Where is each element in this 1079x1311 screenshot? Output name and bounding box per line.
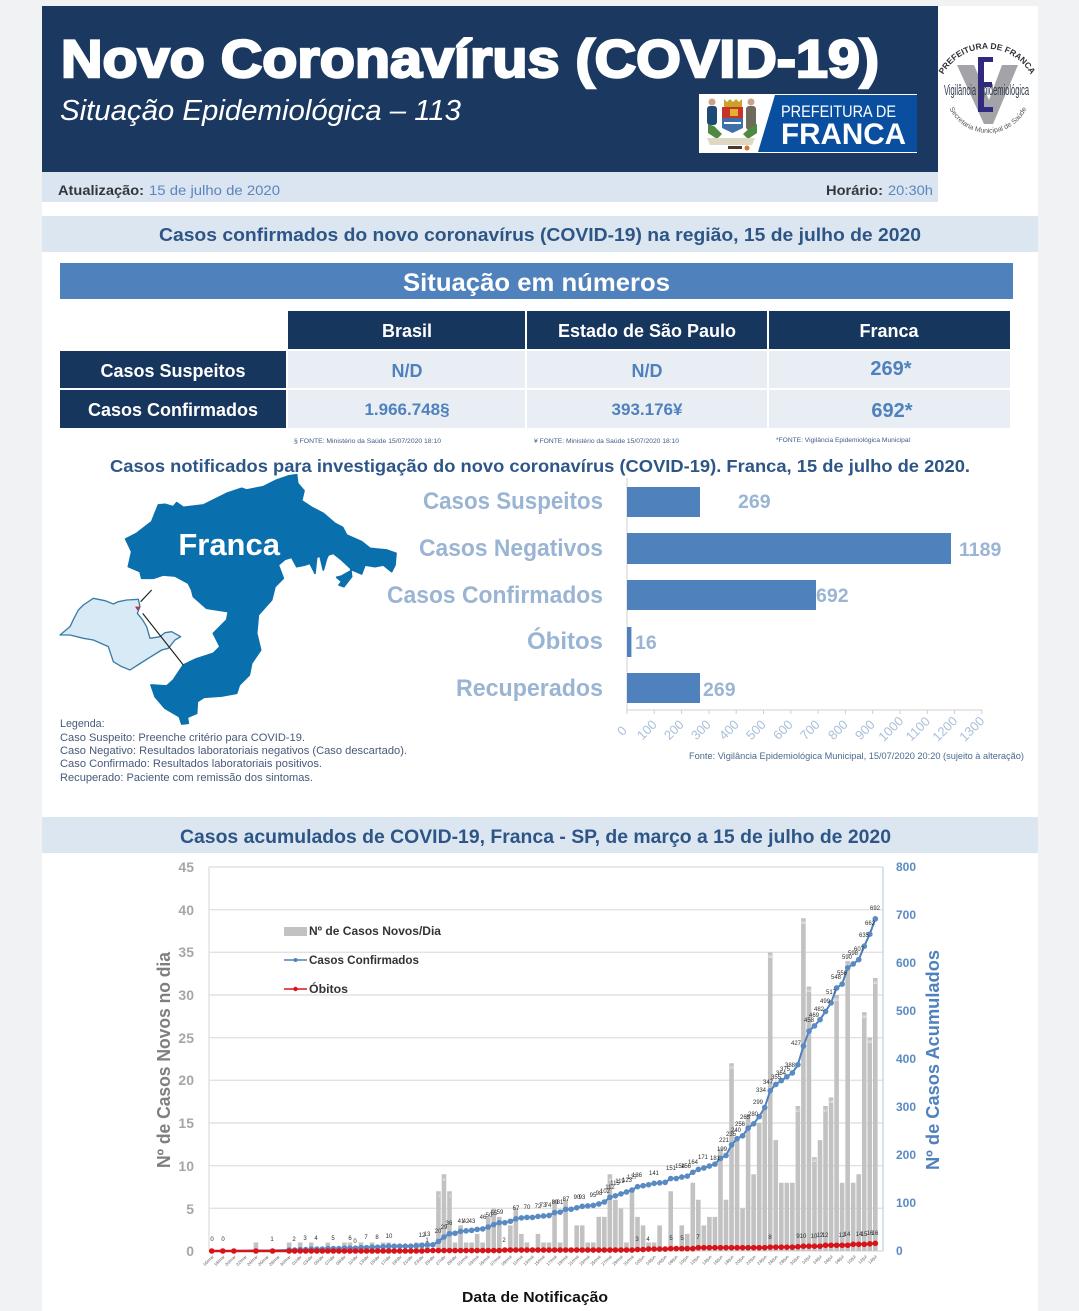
data labels: 590	[842, 955, 853, 961]
x axis date labels: 04/jun	[645, 1254, 657, 1266]
x axis date labels: 29/mai	[611, 1254, 624, 1267]
logo: Vigilância Epidemiológica	[938, 42, 1034, 134]
data labels: 2	[292, 1237, 296, 1243]
x axis date labels: 20/mar	[224, 1254, 237, 1267]
data labels: 3	[635, 1237, 639, 1243]
bar chart: case status: 269	[738, 491, 771, 513]
data labels: 635	[859, 933, 870, 939]
bar chart: case status: Recuperados	[456, 675, 603, 702]
data labels: 7	[364, 1235, 368, 1241]
x axis date labels: 05/abr	[313, 1254, 325, 1266]
x axis date labels: 06/jun	[656, 1254, 668, 1266]
x axis date labels: 10/jul	[846, 1254, 857, 1265]
data labels: 154	[675, 1164, 686, 1170]
bar value labels: 39	[801, 920, 806, 925]
data labels: 280	[748, 1112, 759, 1118]
data labels: 13	[424, 1232, 431, 1238]
left axis labels: 15	[178, 1115, 194, 1131]
x axis date labels: 24/jun	[756, 1254, 768, 1266]
left axis labels: 35	[178, 944, 194, 960]
right axis labels: 200	[896, 1148, 916, 1162]
x axis date labels: 13/mai	[522, 1254, 535, 1267]
bar value labels: 9	[609, 1177, 612, 1182]
table sources: *FONTE: Vigilância Epidemiológica Municipal	[776, 437, 910, 444]
table sources	[294, 437, 910, 445]
left axis labels: 0	[186, 1243, 194, 1259]
right axis labels: 700	[896, 908, 916, 922]
x axis date labels: 06/jul	[823, 1254, 834, 1265]
bar chart: case status: 1189	[959, 539, 1001, 561]
data labels: 556	[837, 971, 848, 977]
logo text: PREFEITURA DE	[781, 103, 896, 121]
bar chart: case status: 700	[797, 717, 823, 743]
bar value labels: 32	[873, 980, 878, 985]
left axis labels: 10	[178, 1158, 194, 1174]
chart legend: Casos Confirmados	[309, 953, 419, 967]
x axis date labels: 16/mar	[202, 1254, 215, 1267]
table: 692*	[871, 400, 913, 422]
x axis date labels: 13/abr	[358, 1254, 370, 1266]
bar value labels: 35	[768, 954, 773, 959]
legend text: Caso Suspeito: Preenche critério para COVID-19.	[60, 732, 305, 744]
x axis date labels: 30/jun	[789, 1254, 801, 1266]
banner: Situação em números	[60, 263, 1013, 299]
legend text: Recuperado: Paciente com remissão dos sintomas.	[60, 772, 313, 784]
x axis date labels: 14/jul	[867, 1254, 878, 1265]
data labels: 41	[458, 1219, 465, 1225]
data labels: 7	[696, 1235, 700, 1241]
data labels: 16	[872, 1231, 879, 1237]
left axis labels: 25	[178, 1030, 194, 1046]
right axis labels: 400	[896, 1052, 916, 1066]
bar value labels: 11	[812, 1158, 817, 1163]
data labels	[210, 906, 881, 1245]
data labels: 73	[540, 1203, 547, 1209]
data labels: 221	[719, 1138, 730, 1144]
data labels: 4	[314, 1236, 318, 1242]
x axis date labels: 11/abr	[347, 1254, 359, 1266]
x axis date labels: 03/abr	[302, 1254, 314, 1266]
x axis date labels: 26/mar	[257, 1254, 270, 1267]
x axis date labels: 19/abr	[391, 1254, 403, 1266]
x axis date labels: 02/jul	[801, 1254, 812, 1265]
data labels: 119	[615, 1179, 625, 1185]
line: deaths	[212, 1243, 875, 1251]
data labels: 548	[831, 975, 842, 981]
data labels: 43	[469, 1219, 476, 1225]
logo: Prefeitura de Franca	[699, 94, 917, 153]
logo: Vigilância Epidemiológica: Secretaria Municipal de Saúde	[950, 107, 1026, 134]
data labels: 10	[386, 1234, 393, 1240]
table: Brasil	[382, 321, 432, 341]
table sources: ¥ FONTE: Ministério da Saúde 15/07/2020 18:10	[534, 438, 679, 445]
data labels: 334	[756, 1088, 767, 1094]
data labels: 458	[804, 1018, 815, 1024]
x axis date labels: 12/jul	[857, 1254, 868, 1265]
bar chart: case status: 400	[716, 717, 742, 743]
table: 1.966.748§	[364, 400, 450, 419]
header banner	[42, 6, 938, 172]
data labels: 164	[688, 1160, 699, 1166]
data labels: 14	[844, 1232, 851, 1238]
data labels: 80	[552, 1200, 559, 1206]
legend text: Legenda:	[60, 718, 105, 730]
data labels: 427	[791, 1041, 802, 1047]
table: Casos Confirmados	[88, 400, 258, 420]
x axis date labels: 12/jun	[689, 1254, 701, 1266]
data labels: 388	[785, 1063, 796, 1069]
x axis date labels: 09/mai	[500, 1254, 513, 1267]
left axis labels: 5	[186, 1201, 194, 1217]
map label: Franca	[178, 527, 281, 562]
panel: situation in numbers	[42, 216, 1038, 445]
logo: Vigilância Epidemiológica: PREFEITURA DE FRANCA	[938, 42, 1034, 74]
x axis date labels: 22/mar	[235, 1254, 248, 1267]
heading: notified cases: Casos notificados para investigação do novo coronavírus (COVID-19). Franca, 15 de julho de 2020.	[110, 456, 970, 476]
x axis date labels	[202, 1254, 878, 1267]
left axis labels: 30	[178, 987, 194, 1003]
bar chart: case status: 500	[743, 717, 769, 743]
data labels: 151	[666, 1166, 677, 1172]
update bar: Atualização:	[58, 182, 144, 198]
x axis date labels: 01/abr	[291, 1254, 303, 1266]
data labels: 469	[809, 1013, 820, 1019]
bar chart: case status: 692	[816, 585, 849, 607]
bar value labels: 17	[823, 1108, 828, 1113]
data labels: 662	[865, 921, 876, 927]
data labels: 499	[820, 999, 831, 1005]
left axis labels: 45	[178, 859, 194, 875]
data labels: 14	[856, 1232, 863, 1238]
map: São Paulo state	[60, 590, 183, 670]
data labels: 87	[563, 1197, 570, 1203]
bars: new cases per day	[256, 918, 875, 1251]
bar chart: case status: 300	[688, 717, 714, 743]
bar chart: case status	[387, 478, 1024, 762]
data labels: 15	[861, 1232, 868, 1238]
subtitle: Situação Epidemiológica – 113	[60, 95, 461, 127]
data labels: 5	[680, 1236, 684, 1242]
data labels: 299	[753, 1100, 764, 1106]
bar chart: case status: Casos Confirmados	[387, 582, 603, 609]
x axis date labels: 21/mai	[567, 1254, 580, 1267]
bar chart: case status: Óbitos	[527, 627, 603, 655]
table	[60, 311, 1010, 428]
table: N/D	[632, 361, 662, 381]
right axis labels: 0	[896, 1244, 903, 1258]
legend text: Caso Confirmado: Resultados laboratoriais positivos.	[60, 758, 322, 770]
x axis date labels: 03/mai	[467, 1254, 480, 1267]
x axis date labels: 15/mai	[533, 1254, 546, 1267]
bar chart: case status: Casos Suspeitos	[423, 488, 603, 515]
data labels: 141	[649, 1171, 660, 1177]
bar value labels: 28	[862, 1014, 867, 1019]
data labels: 16	[867, 1231, 874, 1237]
x axis date labels: 04/jul	[812, 1254, 823, 1265]
bar chart: case status: 1300	[956, 713, 987, 744]
combo chart	[154, 859, 943, 1306]
x axis date labels: 27/abr	[435, 1254, 447, 1266]
bar chart: case status: 269	[703, 679, 736, 701]
right axis labels: 500	[896, 1004, 916, 1018]
data labels: 115	[610, 1181, 620, 1187]
data labels: 265	[740, 1115, 751, 1121]
data labels: 10	[811, 1234, 818, 1240]
table: 269*	[870, 358, 912, 380]
data labels: 199	[717, 1147, 728, 1153]
data labels: 136	[632, 1173, 643, 1179]
bar value labels: 18	[829, 1099, 834, 1104]
bar chart: case status: 16	[635, 632, 657, 654]
heading: regional confirmed cases: Casos confirmados do novo coronavírus (COVID-19) na região, 15 de julho de 2020	[159, 225, 921, 245]
data labels: 81	[557, 1200, 564, 1206]
x axis date labels: 14/jun	[701, 1254, 713, 1266]
x axis date labels: 23/mai	[578, 1254, 591, 1267]
x axis date labels: 29/abr	[446, 1254, 458, 1266]
data labels: 42	[463, 1219, 470, 1225]
data labels: 607	[854, 947, 865, 953]
bar value labels: 22	[729, 1065, 734, 1070]
x axis title: Data de Notificação	[462, 1289, 608, 1306]
data labels: 375	[780, 1067, 791, 1073]
x axis date labels: 01/mai	[456, 1254, 469, 1267]
x axis date labels: 28/mar	[268, 1254, 281, 1267]
data labels: 692	[870, 906, 881, 912]
data labels: 355	[771, 1075, 782, 1081]
x axis date labels: 24/mar	[246, 1254, 259, 1267]
x axis date labels: 17/abr	[380, 1254, 392, 1266]
x axis date labels: 23/abr	[413, 1254, 425, 1266]
x axis date labels: 08/jul	[834, 1254, 845, 1265]
data labels: 1	[425, 1238, 429, 1244]
x axis date labels: 26/jun	[767, 1254, 779, 1266]
x axis date labels: 19/mai	[556, 1254, 569, 1267]
bar chart: case status: 800	[825, 717, 851, 743]
x axis date labels: 30/mar	[279, 1254, 292, 1267]
x axis date labels: 16/jun	[712, 1254, 724, 1266]
x axis date labels: 11/mai	[511, 1254, 524, 1266]
data labels: 240	[731, 1128, 742, 1134]
data labels: 74	[545, 1203, 552, 1209]
data labels: 9	[796, 1234, 800, 1240]
data labels: 0	[353, 1239, 357, 1245]
data labels: 12	[817, 1233, 824, 1239]
data labels: 8	[768, 1235, 772, 1241]
data labels: 29	[441, 1225, 448, 1231]
x axis date labels: 18/mar	[213, 1254, 226, 1267]
data labels: 127	[627, 1175, 638, 1181]
data labels: 235	[726, 1132, 737, 1138]
chart source: Fonte: Vigilância Epidemiológica Municipal, 15/07/2020 20:20 (sujeito à alteração)	[689, 751, 1024, 762]
left axis labels: 40	[178, 902, 194, 918]
bar chart: case status: 1200	[929, 713, 960, 744]
left axis title: Nº de Casos Novos no dia	[154, 951, 174, 1168]
heading: accumulated cases: Casos acumulados de COVID-19, Franca - SP, de março a 15 de julho de 2020	[180, 827, 891, 848]
data labels: 12	[839, 1233, 846, 1239]
data labels: 5	[331, 1236, 335, 1242]
x axis date labels: 02/jun	[634, 1254, 646, 1266]
data labels: 10	[800, 1234, 807, 1240]
x axis date labels: 21/abr	[402, 1254, 414, 1266]
right axis labels: 300	[896, 1100, 916, 1114]
x axis date labels: 15/abr	[369, 1254, 381, 1266]
data labels: 36	[446, 1221, 453, 1227]
x axis date labels: 31/mai	[622, 1254, 635, 1267]
x axis date labels: 10/jun	[678, 1254, 690, 1266]
bar chart: case status: 0	[614, 723, 630, 739]
data labels: 517	[826, 990, 837, 996]
bar chart: case status: 900	[852, 717, 878, 743]
data labels: 102	[600, 1189, 611, 1195]
x axis date labels: 05/mai	[478, 1254, 491, 1267]
bar chart: case status: 600	[770, 717, 796, 743]
data labels: 0	[221, 1237, 225, 1243]
data labels: 171	[698, 1155, 709, 1161]
data labels: 8	[375, 1235, 379, 1241]
title: Novo Coronavírus (COVID-19)	[61, 30, 879, 89]
x axis date labels: 25/mai	[589, 1254, 602, 1267]
data labels: 20	[435, 1229, 442, 1235]
data labels: 50	[486, 1213, 493, 1219]
x axis date labels: 28/jun	[778, 1254, 790, 1266]
data labels: 55	[491, 1211, 498, 1217]
bar value labels: 31	[807, 988, 812, 993]
data labels: 364	[776, 1071, 787, 1077]
data labels: 95	[590, 1193, 597, 1199]
table sources: § FONTE: Ministério da Saúde 15/07/2020 18:10	[294, 438, 441, 445]
bar chart: case status: Casos Negativos	[419, 535, 603, 562]
data labels: 0	[210, 1237, 214, 1243]
bar value labels: 7	[449, 1194, 452, 1199]
bar value labels: 9	[443, 1177, 446, 1182]
left axis labels	[178, 859, 194, 1259]
x axis date labels: 18/jun	[723, 1254, 735, 1266]
bar value labels	[438, 920, 878, 1199]
x axis date labels: 27/mai	[600, 1254, 613, 1267]
data labels: 46	[480, 1215, 487, 1221]
update bar: 20:30h	[888, 182, 933, 198]
x axis date labels: 20/jun	[734, 1254, 746, 1266]
x axis date labels: 07/mai	[489, 1254, 502, 1267]
data labels: 181	[710, 1156, 721, 1162]
update bar	[42, 172, 938, 202]
icon: coat of arms	[707, 98, 757, 150]
bar value labels: 17	[796, 1108, 801, 1113]
x axis date labels: 07/abr	[324, 1254, 336, 1266]
x axis date labels: 25/abr	[424, 1254, 436, 1266]
bar chart: case status: 1100	[903, 714, 933, 744]
logo: Prefeitura de Franca: FRANCA	[781, 118, 906, 151]
data labels: 156	[681, 1164, 692, 1170]
data labels: 4	[646, 1237, 650, 1243]
x axis date labels: 17/mai	[545, 1254, 558, 1267]
data labels: 347	[763, 1080, 774, 1086]
data labels: 598	[848, 951, 859, 957]
data labels: 112	[605, 1185, 615, 1191]
legend text: Caso Negativo: Resultados laboratoriais negativos (Caso descartado).	[60, 745, 407, 757]
data labels: 59	[497, 1210, 504, 1216]
table: Casos Suspeitos	[100, 361, 246, 381]
table: 393.176¥	[612, 400, 683, 419]
data labels: 90	[574, 1195, 581, 1201]
update bar: 15 de julho de 2020	[149, 182, 280, 198]
line: confirmed cases	[212, 919, 875, 1251]
data labels: 3	[303, 1236, 307, 1242]
panel: notified cases	[60, 456, 1024, 784]
bar chart: case status: 100	[634, 717, 660, 743]
data labels: 93	[579, 1195, 586, 1201]
banner: Situação em números: Situação em números	[403, 269, 670, 297]
right axis labels: 600	[896, 956, 916, 970]
data labels: 72	[535, 1204, 542, 1210]
bar value labels: 7	[438, 1194, 441, 1199]
update bar: Horário:	[826, 182, 883, 198]
right axis labels: 800	[896, 860, 916, 874]
chart legend	[284, 924, 441, 996]
data labels: 12	[822, 1233, 829, 1239]
table: Estado de São Paulo	[558, 321, 736, 341]
x axis date labels: 22/jun	[745, 1254, 757, 1266]
data labels: 256	[735, 1122, 746, 1128]
table: N/D	[392, 361, 422, 381]
x axis date labels: 08/jun	[667, 1254, 679, 1266]
data labels: 482	[814, 1007, 825, 1013]
data labels: 5	[669, 1236, 673, 1242]
bar chart: case status: 200	[661, 717, 687, 743]
left axis labels: 20	[178, 1072, 194, 1088]
chart legend: Nº de Casos Novos/Dia	[309, 924, 441, 938]
data labels: 98	[596, 1191, 603, 1197]
data labels: 12	[419, 1233, 426, 1239]
right axis labels: 100	[896, 1196, 916, 1210]
bar value labels: 7	[636, 1194, 639, 1199]
right axis title: Nº de Casos Acumulados	[923, 950, 943, 1170]
right axis labels	[896, 860, 916, 1258]
map: Franca municipality	[126, 475, 396, 724]
data labels: 67	[513, 1206, 520, 1212]
bar value labels: 30	[834, 997, 839, 1002]
x axis date labels: 09/abr	[335, 1254, 347, 1266]
data labels: 1	[270, 1237, 274, 1243]
legend text	[60, 718, 407, 784]
bar chart: case status: 1000	[875, 713, 906, 744]
data labels: 6	[348, 1236, 352, 1242]
chart legend: Óbitos	[309, 981, 348, 996]
bar value labels: 34	[845, 963, 850, 968]
table: Franca	[859, 321, 920, 341]
data labels: 70	[524, 1205, 531, 1211]
data labels: 2	[502, 1238, 506, 1244]
data labels: 123	[622, 1178, 633, 1184]
bar value labels: 25	[868, 1039, 873, 1044]
panel: accumulated cases	[42, 817, 1038, 1306]
